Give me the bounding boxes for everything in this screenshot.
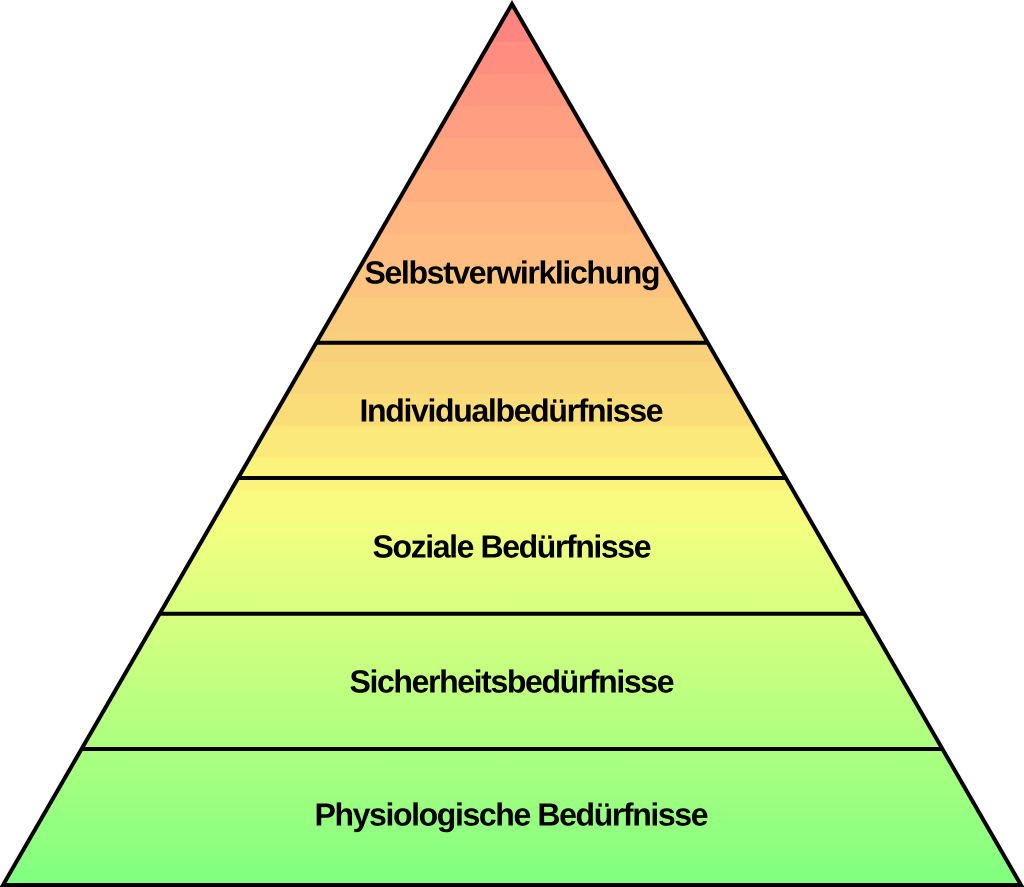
- tier label: Individualbedürfnisse: Individualbedürfnisse: [360, 392, 664, 428]
- tier label: Physiologische Bedürfnisse: Physiologische Bedürfnisse: [314, 796, 708, 832]
- tier label: Sicherheitsbedürfnisse: Sicherheitsbedürfnisse: [350, 664, 674, 700]
- tier label: Soziale Bedürfnisse: Soziale Bedürfnisse: [372, 528, 652, 564]
- tier label: Selbstverwirklichung: Selbstverwirklichung: [364, 254, 660, 290]
